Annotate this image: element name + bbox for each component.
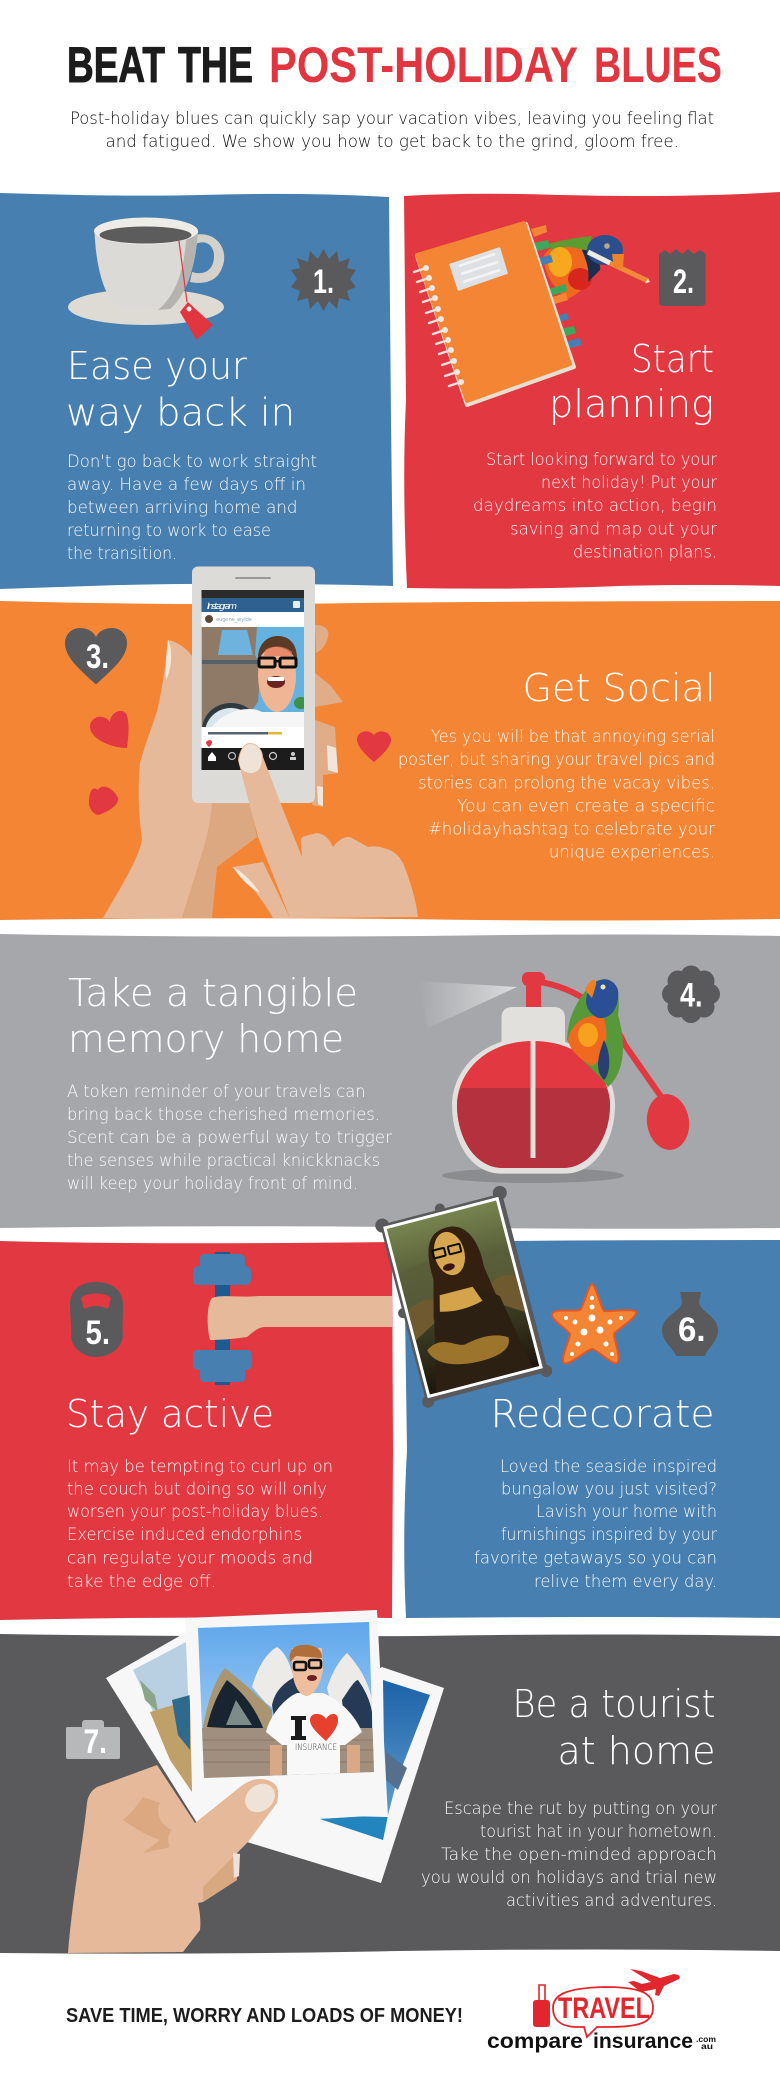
- body text: Loved the seaside inspired: [500, 1457, 717, 1476]
- icon: red hearts: [89, 711, 391, 815]
- body text: [473, 450, 717, 562]
- intro text: [70, 109, 714, 151]
- body text: the transition.: [67, 544, 177, 563]
- icon: parrot on perfume: [567, 979, 623, 1087]
- body text: Exercise induced endorphins: [67, 1525, 302, 1544]
- body text: tourist hat in your hometown.: [480, 1822, 717, 1841]
- body text: [474, 1457, 717, 1591]
- panel: 2 start planning: [404, 192, 780, 589]
- body text: next holiday! Put your: [541, 473, 717, 492]
- body text: bring back those cherished memories.: [67, 1105, 380, 1124]
- badge: number 7 suitcase: 7.: [84, 1723, 107, 1761]
- heading: at home: [558, 1729, 716, 1773]
- body text: You can even create a specific: [457, 796, 715, 816]
- badge: number 3 heart: 3.: [86, 638, 109, 676]
- body text: daydreams into action, begin: [473, 496, 717, 515]
- body text: Take the open-minded approach: [441, 1845, 717, 1864]
- logo: Travel Compare Insurance: insurance: [593, 2030, 693, 2053]
- heading: [68, 971, 358, 1061]
- badge: number 1: [291, 249, 356, 311]
- heading: way back in: [66, 390, 295, 434]
- badge: number 4 flower: [662, 966, 720, 1023]
- body text: [67, 452, 317, 563]
- logo: Travel Compare Insurance: compare: [487, 2030, 583, 2053]
- heading: [512, 1682, 716, 1773]
- icon: parrot with pencil: [543, 235, 650, 300]
- heading: Ease your: [67, 344, 247, 388]
- body text: between arriving home and: [67, 498, 298, 517]
- logo: Travel Compare Insurance: au: [701, 2042, 713, 2051]
- icon: framed Mona Lisa portrait: [373, 1184, 554, 1409]
- body text: Start looking forward to your: [486, 450, 717, 469]
- right photo: [247, 1667, 444, 1883]
- icon: starfish: [552, 1284, 636, 1363]
- badge: number 5 kettlebell: [70, 1282, 123, 1357]
- panel: 1 ease your way back in: [0, 193, 393, 589]
- body text: [67, 1082, 392, 1193]
- heading: memory home: [68, 1017, 344, 1061]
- heading: Be a tourist: [512, 1682, 716, 1726]
- logo: Travel Compare Insurance: TRAVEL: [558, 1992, 650, 2025]
- body text: A token reminder of your travels can: [67, 1082, 366, 1101]
- panel: 7 be a tourist at home: [0, 1610, 780, 1954]
- body text: stories can prolong the vacay vibes.: [418, 774, 715, 792]
- body text: favorite getaways so you can: [474, 1548, 717, 1568]
- heading: [66, 344, 295, 434]
- icon: teacup with saucer and tag: [68, 218, 224, 340]
- body text: [398, 727, 715, 862]
- phone: [192, 566, 315, 803]
- body text: Lavish your home with: [536, 1502, 717, 1521]
- title: BEAT: [67, 37, 165, 93]
- icon: perfume bottle: [418, 972, 693, 1183]
- title: POST-HOLIDAY: [269, 37, 578, 93]
- panel: 4 tangible memory: [0, 934, 780, 1229]
- body text: furnishings inspired by your: [501, 1525, 717, 1544]
- thumb, pointing finger and second hand: [233, 743, 418, 918]
- title: [67, 37, 722, 93]
- body text: Scent can be a powerful way to trigger: [67, 1128, 392, 1147]
- badge: number 4 flower: 4.: [680, 977, 702, 1015]
- icon: orange notebook: [414, 223, 582, 405]
- body text: [421, 1799, 717, 1910]
- body text: Don't go back to work straight: [67, 452, 317, 471]
- body text: bungalow you just visited?: [501, 1480, 717, 1498]
- heading: Get Social: [522, 666, 716, 710]
- body text: will keep your holiday front of mind.: [67, 1174, 358, 1193]
- logo: Travel Compare Insurance: .com: [696, 2035, 716, 2044]
- body text: can regulate your moods and: [67, 1548, 313, 1568]
- body text: #holidayhashtag to celebrate your: [428, 820, 715, 838]
- centre photo: INSURANCE: [295, 1743, 337, 1753]
- body text: you would on holidays and trial new: [421, 1868, 717, 1887]
- heading: Take a tangible: [68, 971, 358, 1015]
- body text: unique experiences.: [549, 842, 715, 862]
- badge: number 2 notepad: 2.: [673, 263, 694, 301]
- phone: Instagram: [207, 602, 237, 612]
- icon: hand lifting dumbbell: [193, 1252, 392, 1385]
- body text: poster, but sharing your travel pics and: [398, 750, 715, 769]
- body text: destination plans.: [573, 542, 717, 562]
- body text: Escape the rut by putting on your: [444, 1799, 717, 1818]
- badge: number 1: 1.: [313, 263, 334, 301]
- body text: the couch but doing so will only: [67, 1480, 327, 1498]
- body text: Yes you will be that annoying serial: [431, 727, 715, 746]
- body text: activities and adventures.: [506, 1891, 717, 1910]
- badge: number 6 vase: [662, 1292, 718, 1356]
- heading: Stay active: [66, 1392, 274, 1436]
- icon: hand holding photos: [68, 1610, 444, 1953]
- body text: It may be tempting to curl up on: [67, 1457, 333, 1476]
- phone: eugene_wylde: [216, 617, 252, 623]
- body text: worsen your post-holiday blues.: [67, 1502, 323, 1521]
- hand: [68, 1765, 281, 1953]
- heading: Redecorate: [490, 1392, 714, 1436]
- left photo: [106, 1630, 205, 1825]
- panel: 3 get social: [0, 566, 780, 920]
- intro text: and fatigued. We show you how to get back to the grind, gloom free.: [106, 132, 679, 151]
- title: THE: [178, 37, 253, 93]
- badge: number 5 kettlebell: 5.: [86, 1314, 110, 1352]
- panel: 5 stay active: [0, 1241, 393, 1620]
- badge: number 6 vase: 6.: [678, 1311, 706, 1349]
- badge: number 3 heart: [65, 628, 127, 684]
- footer tagline: SAVE TIME, WORRY AND LOADS OF MONEY!: [66, 2005, 463, 2027]
- heading: planning: [549, 382, 714, 426]
- body text: take the edge off.: [67, 1572, 216, 1591]
- badge: number 7 suitcase: [66, 1720, 120, 1761]
- body text: away. Have a few days off in: [67, 475, 306, 494]
- body text: saving and map out your: [510, 520, 717, 538]
- body text: returning to work to ease: [67, 521, 271, 540]
- heading: [549, 337, 714, 426]
- intro text: Post-holiday blues can quickly sap your vacation vibes, leaving you feeling flat: [70, 109, 714, 128]
- badge: number 2 notepad: [659, 249, 706, 306]
- centre photo: [185, 1610, 388, 1823]
- logo: Travel Compare Insurance: [487, 1969, 716, 2053]
- title: BLUES: [594, 37, 722, 93]
- panel: 6 redecorate: [373, 1184, 780, 1618]
- body text: the senses while practical knickknacks: [67, 1151, 380, 1170]
- body text: relive them every day.: [534, 1572, 717, 1591]
- photo: selfie at the Eiffel tower: [202, 627, 304, 727]
- body text: [67, 1457, 333, 1591]
- icon: hand holding phone: [103, 566, 418, 918]
- heading: Start: [631, 337, 714, 381]
